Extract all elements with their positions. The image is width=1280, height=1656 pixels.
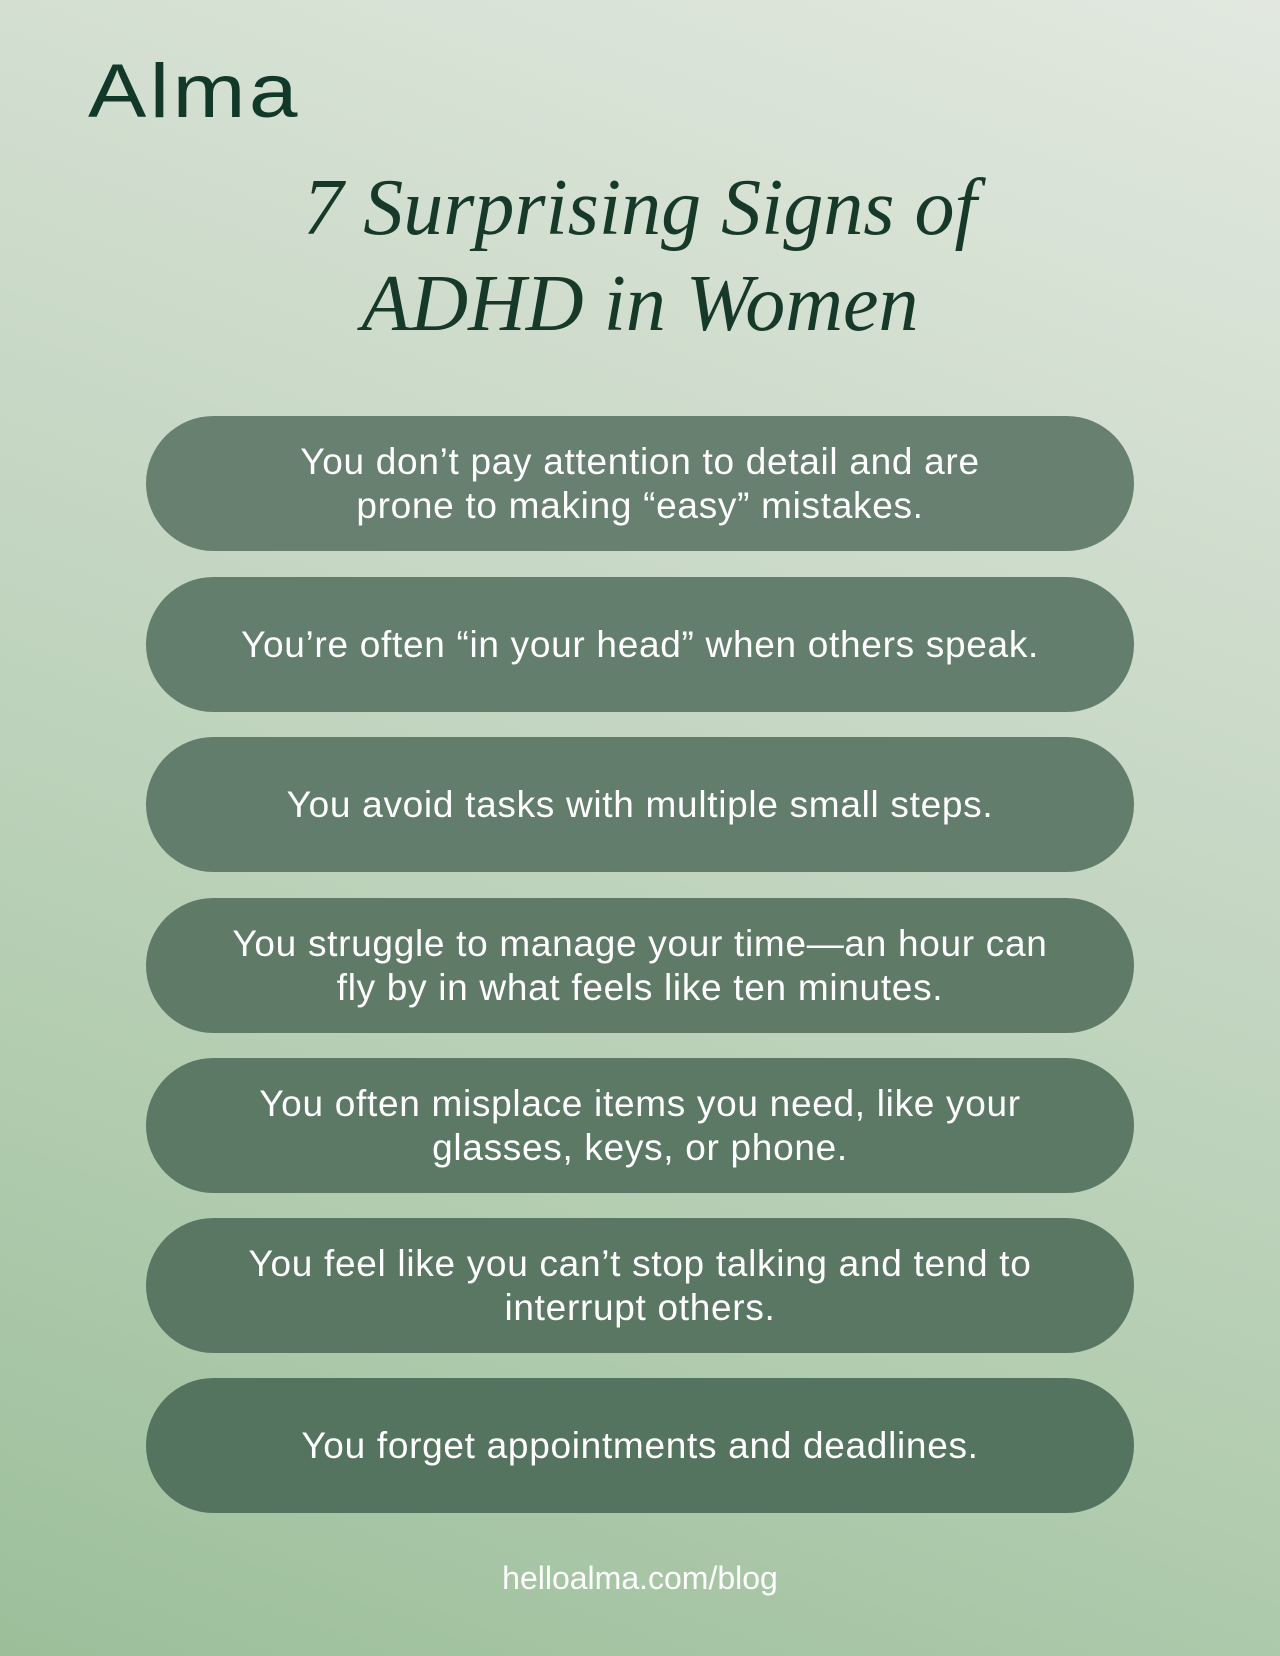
pill 1: [146, 416, 1134, 551]
pill 5: You often misplace items you need, like your: [259, 1082, 1021, 1124]
pill 6: interrupt others.: [504, 1286, 776, 1328]
pill 5: [146, 1058, 1134, 1193]
pill 4: You struggle to manage your time—an hour can: [232, 922, 1048, 964]
title: 7 Surprising Signs of: [303, 164, 977, 252]
pill 7: [146, 1378, 1134, 1513]
pill 2: You’re often “in your head” when others speak.: [241, 624, 1039, 664]
title: ADHD in Women: [362, 260, 918, 348]
logo: Alma: [88, 49, 301, 134]
title: [303, 164, 986, 348]
pill 6: [146, 1218, 1134, 1353]
footer url: helloalma.com/blog: [502, 1560, 778, 1596]
pill 3: You avoid tasks with multiple small steps.: [287, 784, 993, 824]
pill 7: You forget appointments and deadlines.: [301, 1424, 979, 1466]
pill 3: [146, 737, 1134, 872]
pill 1: prone to making “easy” mistakes.: [356, 484, 924, 526]
pill 1: You don’t pay attention to detail and are: [300, 440, 980, 482]
pill 4: fly by in what feels like ten minutes.: [337, 966, 943, 1008]
pill 6: You feel like you can’t stop talking and tend to: [248, 1242, 1032, 1284]
pill 5: glasses, keys, or phone.: [432, 1126, 848, 1168]
pill 4: [146, 898, 1134, 1033]
pill 2: [146, 577, 1134, 712]
